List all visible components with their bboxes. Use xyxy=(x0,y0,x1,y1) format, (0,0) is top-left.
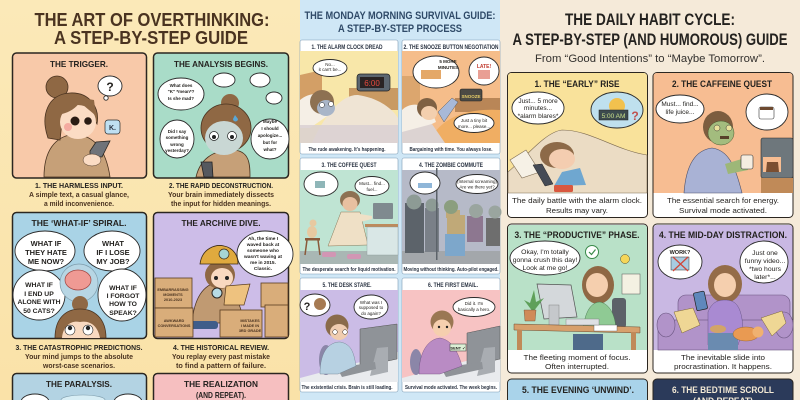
speech bubble: internal screaming: Are we there yet? xyxy=(459,184,495,190)
panel: caffeine quest: Survival mode activated. xyxy=(679,206,767,215)
panel: the trigger: THE TRIGGER. xyxy=(50,59,108,69)
character: triumphant worker: SENT ✓ xyxy=(450,346,466,350)
character: miner girl xyxy=(190,246,250,329)
thought bubble: 5 more minutes: MINUTES xyxy=(438,65,458,70)
thought bubble: work crossed out xyxy=(658,245,702,279)
panel: the trigger xyxy=(12,53,146,178)
speech bubble: no it can't be: it can't be... xyxy=(319,67,341,72)
panel: desk stare: 5. THE DESK STARE. xyxy=(322,283,372,289)
panel: zombie commute xyxy=(402,158,502,274)
panel: the paralysis xyxy=(12,374,146,400)
title: monday morning xyxy=(304,10,496,35)
caption: step 1: 1. THE HARMLESS INPUT. xyxy=(35,183,123,190)
panel: productive phase: The fleeting moment of focus. xyxy=(524,353,630,362)
thought bubble: coffee xyxy=(304,172,338,196)
character: happy worker xyxy=(573,266,626,350)
panel: the realization and repeat xyxy=(154,374,288,400)
speech bubble: archive: someone who xyxy=(247,248,279,254)
archive boxes: MISTAKES xyxy=(240,319,260,323)
panel: productive phase xyxy=(508,224,648,373)
sofa xyxy=(657,295,793,350)
thought clouds: but for xyxy=(263,140,277,145)
speech bubble: life juice: Must... find... xyxy=(661,101,699,108)
speech bubble: internal screaming: (Internal screaming) xyxy=(457,179,498,184)
thought clouds xyxy=(158,73,289,159)
worry clouds: MY JOB? xyxy=(96,257,130,266)
thought bubble: 5:00 AM xyxy=(591,92,643,128)
speech bubble: archive: me in 2015. xyxy=(250,260,276,266)
caption: step 4: 4. THE HISTORICAL REVIEW. xyxy=(173,345,269,352)
title: art of overthinking: A STEP-BY-STEP GUIDE xyxy=(54,28,248,48)
worry clouds: I END UP xyxy=(24,291,54,298)
panel: snooze button negotiation: 2. THE SNOOZE BUTTON NEGOTIATION xyxy=(404,45,498,51)
speech bubble: no it can't be: No... xyxy=(325,62,335,67)
panel: desk stare xyxy=(300,278,398,392)
panel: zombie commute: Moving without thinking. Auto-pilot engaged. xyxy=(404,267,499,273)
speech bubble: crush this day xyxy=(510,241,580,275)
archive boxes: EMBARRASSING xyxy=(157,288,189,292)
speech bubble: did it: Did it. I'm xyxy=(465,301,484,306)
sleeping cat xyxy=(733,326,764,341)
speech bubble: one funny video: Just one xyxy=(752,250,778,257)
coffee machine xyxy=(761,138,793,193)
panel: evening unwind xyxy=(508,379,648,400)
panel: coffee quest: 3. THE COFFEE QUEST xyxy=(322,163,377,169)
caption: step 1: a mild inconvenience. xyxy=(44,201,114,208)
speech bubble: archive: wasn't waving at xyxy=(243,254,282,260)
thought bubble: work crossed out: WORK? xyxy=(670,250,691,256)
panel: first email xyxy=(402,278,500,392)
character: tired worker xyxy=(319,314,356,375)
worry clouds: WHAT xyxy=(102,239,124,248)
speech bubble: archive: Ah, the time I xyxy=(248,236,279,242)
panel: mid-day distraction: procrastination. It happens. xyxy=(674,362,772,371)
panel: bedtime scroll xyxy=(653,379,793,400)
speech bubble: must find fuel: fuel... xyxy=(366,187,378,192)
thought bubble: question mark: ? xyxy=(106,80,114,94)
archive boxes: 3RD GRADE xyxy=(239,329,262,333)
caption: step 2: Your brain immediately dissects xyxy=(168,192,274,199)
character: man in robe xyxy=(322,191,372,259)
character: girl with phone xyxy=(44,76,110,177)
caption: step 2: 2. THE RAPID DECONSTRUCTION. xyxy=(169,183,273,190)
caption: step 3: Your mind jumps to the absolute xyxy=(25,354,133,361)
thought clouds: Is she mad? xyxy=(168,96,194,101)
guide 3: daily habit cycle xyxy=(508,10,793,400)
speech bubble: crush this day: gonna crush this day! xyxy=(513,257,577,264)
worry clouds: HOW TO xyxy=(109,301,137,308)
panel: the what-if spiral: THE ‘WHAT-IF’ SPIRAL. xyxy=(32,218,126,228)
speech bubble: one funny video xyxy=(740,241,788,283)
panel: mid-day distraction xyxy=(653,224,793,373)
speech bubble: one funny video: funny video... xyxy=(745,258,785,265)
panel: first email: 6. THE FIRST EMAIL. xyxy=(428,283,478,289)
worry clouds: I FORGOT xyxy=(107,293,140,300)
panel: first email: Survival mode activated. The week begins. xyxy=(405,385,497,391)
worry clouds: SPEAK? xyxy=(109,310,137,317)
speech bubble: 5 more minutes: minutes... xyxy=(524,105,552,112)
speech bubble: archive xyxy=(237,231,293,277)
chat bubble: K: K. xyxy=(109,125,116,132)
speech bubble: what was I supposed to do xyxy=(354,295,388,319)
speech bubble: 5 more minutes: *alarm blares* xyxy=(518,113,559,120)
panel: early rise: 1. THE “EARLY” RISE xyxy=(534,79,620,90)
title: daily habit cycle xyxy=(512,10,788,49)
panel: the realization and repeat: (AND REPEAT). xyxy=(196,390,246,400)
worry clouds: 50 CATS? xyxy=(23,308,55,315)
speech bubble: what was I supposed to do: What was I xyxy=(360,300,382,305)
thought clouds: "K" *mean*? xyxy=(168,89,195,94)
speech bubble: one funny video: later*... xyxy=(754,274,776,281)
speech bubble: life juice xyxy=(656,95,704,123)
caption: step 3: worst-case scenarios. xyxy=(42,363,115,370)
thought clouds: apologize... xyxy=(258,133,282,138)
panel: caffeine quest xyxy=(653,72,793,218)
panel: early rise xyxy=(508,72,648,218)
thought clouds: something xyxy=(166,135,189,140)
bed and sleeper xyxy=(508,130,647,193)
worry clouds: WHAT IF xyxy=(109,285,137,292)
worry clouds: ALONE WITH xyxy=(17,299,61,306)
caption: step 1 xyxy=(29,183,129,208)
worry clouds: IF I LOSE xyxy=(96,248,130,257)
archive boxes: MOMENTS xyxy=(163,293,183,297)
thought clouds: What does xyxy=(170,83,193,88)
caption: step 3 xyxy=(16,345,143,370)
speech bubble: 5 more minutes xyxy=(512,92,564,124)
panel: evening unwind: 5. THE EVENING ‘UNWIND’. xyxy=(522,385,634,396)
panel: the what-if spiral xyxy=(12,212,146,338)
title: daily habit cycle: THE DAILY HABIT CYCLE: xyxy=(565,10,735,29)
archive boxes: I MADE IN xyxy=(241,324,259,328)
panel: early rise: Results may vary. xyxy=(546,206,608,215)
speech bubble: did it: basically a hero. xyxy=(458,307,490,312)
speech bubble: must find fuel xyxy=(355,176,389,196)
panel: early rise: The daily battle with the alarm clock. xyxy=(512,196,642,205)
archive boxes: AWKWARD xyxy=(164,319,184,323)
thought bubble: tangled thoughts: ? xyxy=(304,301,311,313)
subtitle: From “Good Intentions” to “Maybe Tomorrow”. xyxy=(535,53,765,65)
worry clouds xyxy=(13,231,146,321)
caption: step 2 xyxy=(168,183,274,208)
panel: productive phase: Often interrupted. xyxy=(545,362,609,371)
thought bubble: bed xyxy=(410,172,440,194)
thought bubble: 5 more minutes xyxy=(413,56,459,88)
speech bubble: did it xyxy=(453,298,495,316)
speech bubble: 5 more minutes: Just... 5 more xyxy=(518,98,558,105)
cat on stool xyxy=(305,220,320,255)
thought bubble: late: LATE! xyxy=(477,64,492,70)
panel: caffeine quest: The essential search for energy. xyxy=(667,196,779,205)
guide 2: monday morning survival guide xyxy=(300,10,502,392)
archive boxes: 2010-2023 xyxy=(164,298,182,302)
panel: desk stare: The existential crisis. Brain is still loading. xyxy=(302,385,393,391)
panel: productive phase: 3. THE “PRODUCTIVE” PHASE. xyxy=(514,230,640,241)
panel: mid-day distraction: The inevitable slide into xyxy=(681,353,765,362)
panel: the analysis begins xyxy=(154,53,289,178)
panel: bedtime scroll: 6. THE BEDTIME SCROLL xyxy=(672,385,774,396)
panel: alarm clock dread xyxy=(300,40,398,154)
thought bubble: 5 more minutes: 5 MORE xyxy=(439,59,457,64)
icon: brain xyxy=(60,264,98,302)
speech bubble: just a tiny bit more xyxy=(454,114,494,132)
panel: zombie commute: 4. THE ZOMBIE COMMUTE xyxy=(419,163,483,169)
panel: snooze button negotiation: Bargaining with time. You always lose. xyxy=(410,147,493,153)
speech bubble: just a tiny bit more: Just a tiny bit xyxy=(461,118,488,123)
potted plant xyxy=(524,290,544,321)
panel: alarm clock dread: 1. THE ALARM CLOCK DREAD xyxy=(312,45,383,51)
worry clouds: WHAT IF xyxy=(25,282,53,289)
thought clouds: wrong xyxy=(169,142,184,147)
caption: step 2: the input for hidden meanings. xyxy=(171,201,271,208)
speech bubble: no it can't be xyxy=(313,60,347,76)
icon: alarm clock: 6:00 xyxy=(364,79,380,88)
panel: the analysis begins: THE ANALYSIS BEGINS. xyxy=(174,59,268,69)
thought bubble: 5:00 AM: ? xyxy=(631,109,639,123)
panel: alarm clock dread: The rude awakening. It's happening. xyxy=(308,147,386,153)
speech bubble: one funny video: *two hours xyxy=(749,266,782,273)
coffee machine and counter xyxy=(365,203,398,255)
speech bubble: what was I supposed to do: supposed to xyxy=(359,305,384,310)
bed and sleeper xyxy=(300,70,398,143)
speech bubble: crush this day: Okay, I'm totally xyxy=(521,249,569,256)
thought bubble: coffee cup xyxy=(746,94,788,130)
worry clouds: WHAT IF xyxy=(31,239,62,248)
panel: the archive dive: THE ARCHIVE DIVE. xyxy=(182,218,260,228)
icons: check and idea xyxy=(586,246,640,294)
caption: step 3: 3. THE CATASTROPHIC PREDICTIONS. xyxy=(16,345,143,352)
thought clouds: Maybe xyxy=(263,119,277,124)
panel: mid-day distraction: 4. THE MID-DAY DISTRACTION. xyxy=(659,230,787,241)
caption: step 4 xyxy=(172,345,270,370)
panel: coffee quest: The desperate search for liquid motivation. xyxy=(302,267,396,273)
character: zombie in robe xyxy=(684,111,753,193)
panel: snooze button negotiation xyxy=(402,40,500,154)
panel: the paralysis: THE PARALYSIS. xyxy=(46,379,112,389)
computer and desk xyxy=(514,284,640,350)
guide 1: the art of overthinking xyxy=(12,10,293,400)
icon: phone xyxy=(90,141,110,157)
thought bubble: 5:00 AM: 5:00 AM xyxy=(602,113,625,120)
character: girl on sofa xyxy=(693,265,743,350)
caption: step 4: You replay every past mistake xyxy=(172,354,270,361)
desk and monitor xyxy=(402,326,500,382)
title: art of overthinking: THE ART OF OVERTHINKING: xyxy=(34,10,270,30)
thought clouds: yesterday? xyxy=(165,148,189,153)
panel: caffeine quest: 2. THE CAFFEINE QUEST xyxy=(672,79,772,90)
archive boxes xyxy=(155,278,288,337)
speech bubble: archive: Classic. xyxy=(254,266,272,272)
worry clouds: THEY HATE xyxy=(25,248,67,257)
worry clouds: ME NOW? xyxy=(28,257,65,266)
speech bubble: archive: waved back at xyxy=(246,242,280,248)
speech bubble: life juice: life juice... xyxy=(666,109,695,116)
cushions xyxy=(674,308,786,336)
title: monday morning: A STEP-BY-STEP PROCESS xyxy=(338,23,462,35)
speech bubble: internal screaming xyxy=(456,174,498,194)
bed and sleeper: SNOOZE xyxy=(461,94,481,99)
speech bubble: crush this day: Look at me go! xyxy=(523,265,568,272)
title: art of overthinking xyxy=(34,10,270,48)
commuters xyxy=(405,168,502,260)
panel: the archive dive xyxy=(154,212,293,338)
caption: step 1: A simple text, a casual glance, xyxy=(29,192,129,199)
desk and monitor xyxy=(300,324,398,382)
archive boxes: CONVERSATIONS xyxy=(158,324,191,328)
title: monday morning: THE MONDAY MORNING SURVIVAL GUIDE: xyxy=(304,10,496,22)
character: anxious girl xyxy=(196,94,251,177)
character: girl looking up xyxy=(55,296,106,338)
thought clouds: I should xyxy=(261,126,279,131)
caption: step 4: to find a pattern of failure. xyxy=(176,363,266,370)
speech bubble: what was I supposed to do: do again? xyxy=(361,311,381,316)
speech bubble: must find fuel: Must... find... xyxy=(359,181,385,186)
speech bubble: just a tiny bit more: more... please... xyxy=(458,124,490,129)
thought clouds: what? xyxy=(262,147,277,152)
panel: the realization and repeat: THE REALIZATION xyxy=(184,379,258,389)
thought clouds: Did I say xyxy=(168,129,187,134)
panel: coffee quest xyxy=(300,158,398,274)
